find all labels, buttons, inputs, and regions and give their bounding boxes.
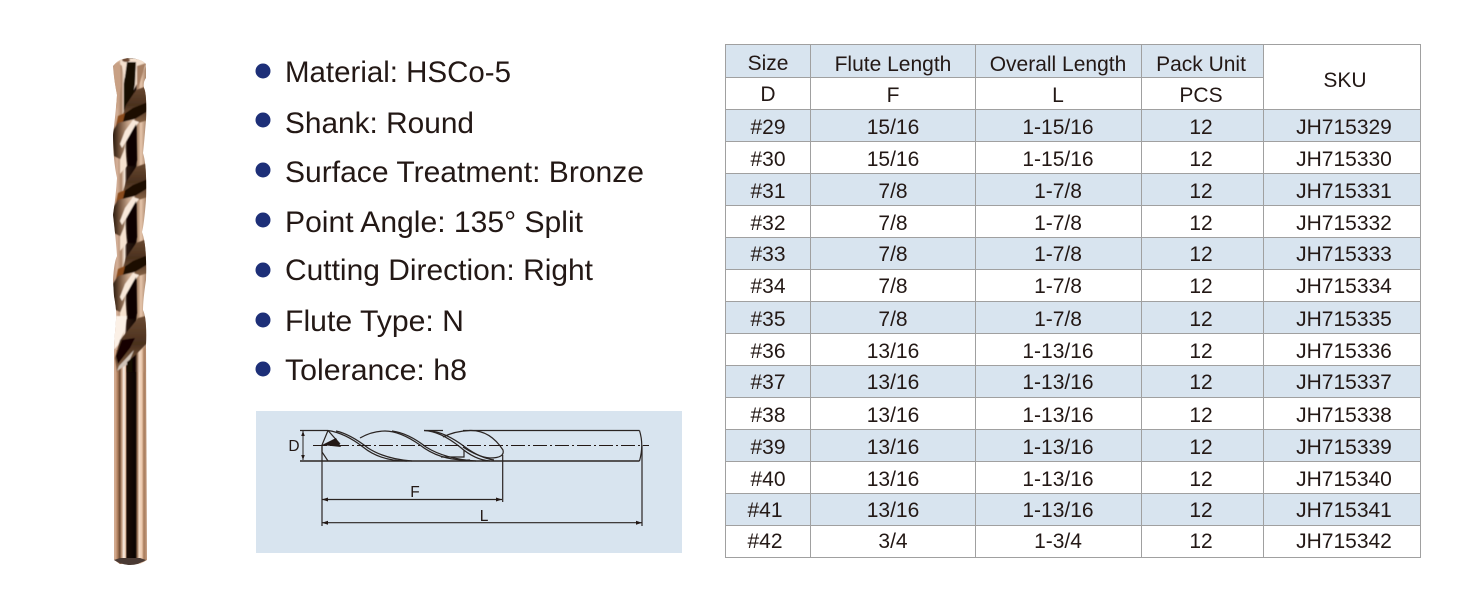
- center line: [313, 444, 649, 446]
- row #39: #39: [750, 436, 786, 459]
- spec: cutting direction: Cutting Direction: Right: [285, 254, 594, 287]
- specification table: [725, 44, 1420, 558]
- row #35: #35: [750, 308, 786, 331]
- table header: Overall Length: [990, 53, 1126, 76]
- row #31: 12: [1189, 180, 1213, 203]
- table header: [748, 52, 1367, 107]
- row #37: 12: [1189, 371, 1213, 394]
- spec: shank: Shank: Round: [285, 107, 474, 140]
- row #35: JH715335: [1296, 308, 1392, 331]
- drill outline: [300, 430, 642, 461]
- row #39: 13/16: [867, 436, 919, 459]
- spec: surface treatment: Surface Treatment: Bronze: [285, 156, 644, 189]
- row #35: [750, 308, 1392, 331]
- row #42: 1-3/4: [1034, 530, 1082, 553]
- row #39: [750, 436, 1392, 459]
- row #34: 12: [1189, 275, 1213, 298]
- row #29: #29: [750, 116, 786, 139]
- row #29: JH715329: [1296, 116, 1392, 139]
- row #38: 13/16: [867, 404, 919, 427]
- row #38: #38: [750, 404, 786, 427]
- row #29: [750, 116, 1392, 139]
- row #33: 12: [1189, 243, 1213, 266]
- row #35: 1-7/8: [1034, 308, 1082, 331]
- row #30: 12: [1189, 148, 1213, 171]
- row #32: 7/8: [878, 212, 908, 235]
- row #33: JH715333: [1296, 243, 1392, 266]
- table header: L: [1052, 84, 1064, 107]
- row #31: 1-7/8: [1034, 180, 1082, 203]
- row #38: 12: [1189, 404, 1213, 427]
- dimension L: [322, 445, 642, 526]
- point angle mark: [322, 438, 341, 447]
- spec: tolerance: Tolerance: h8: [285, 354, 467, 387]
- specification list: [256, 56, 644, 387]
- row #30: [750, 148, 1392, 171]
- row #32: 1-7/8: [1034, 212, 1082, 235]
- row #34: 1-7/8: [1034, 275, 1082, 298]
- row #32: [750, 212, 1392, 235]
- row #39: 12: [1189, 436, 1213, 459]
- row #37: 13/16: [867, 371, 919, 394]
- table header: Flute Length: [835, 53, 951, 76]
- row #30: #30: [750, 148, 786, 171]
- row #30: 15/16: [867, 148, 919, 171]
- spec: point angle: Point Angle: 135° Split: [285, 206, 584, 239]
- row #38: 1-13/16: [1022, 404, 1094, 427]
- table header: Size: [748, 52, 788, 75]
- final flute run-out: [113, 316, 148, 372]
- row #29: 15/16: [867, 116, 919, 139]
- row #31: [750, 180, 1392, 203]
- dimension D: D: [288, 438, 300, 455]
- row #34: 7/8: [878, 275, 908, 298]
- table header: SKU: [1323, 69, 1367, 92]
- row #42: #42: [747, 530, 783, 553]
- panel: dimension diagram: [256, 411, 682, 553]
- row #36: #36: [750, 340, 786, 363]
- table header: D: [760, 83, 776, 106]
- dimension L: L: [480, 508, 489, 525]
- row #41: 12: [1189, 499, 1213, 522]
- spec: material: Material: HSCo-5: [285, 56, 511, 89]
- row #29: 1-15/16: [1022, 116, 1094, 139]
- flute segment 2: [112, 163, 148, 251]
- row #36: 1-13/16: [1022, 340, 1094, 363]
- row #32: #32: [750, 212, 786, 235]
- row #40: 13/16: [867, 468, 919, 491]
- row #41: [747, 499, 1392, 522]
- row #39: JH715339: [1296, 436, 1392, 459]
- row #37: [750, 371, 1392, 394]
- row #41: 1-13/16: [1022, 499, 1094, 522]
- spec: flute type: Flute Type: N: [285, 305, 464, 338]
- row #36: JH715336: [1296, 340, 1392, 363]
- row #41: 13/16: [867, 499, 919, 522]
- drill bit photo: [113, 58, 147, 565]
- row #37: JH715337: [1296, 371, 1392, 394]
- table row shading: [725, 44, 1420, 525]
- row #33: 7/8: [878, 243, 908, 266]
- drill tip shadow: [114, 558, 146, 565]
- row #41: #41: [747, 499, 783, 522]
- row #35: 12: [1189, 308, 1213, 331]
- flute segment 1: [112, 86, 148, 174]
- row #31: JH715331: [1296, 180, 1392, 203]
- dimension D: [288, 431, 305, 460]
- row #36: 12: [1189, 340, 1213, 363]
- row #33: #33: [750, 243, 786, 266]
- row #32: 12: [1189, 212, 1213, 235]
- row #38: [750, 404, 1392, 427]
- row #31: #31: [750, 180, 786, 203]
- row #41: JH715341: [1296, 499, 1392, 522]
- row #37: #37: [750, 371, 786, 394]
- row #35: 7/8: [878, 308, 908, 331]
- row #42: [747, 530, 1392, 553]
- row #38: JH715338: [1296, 404, 1392, 427]
- row #40: [750, 468, 1392, 491]
- table header: Pack Unit: [1156, 53, 1246, 76]
- row #40: 1-13/16: [1022, 468, 1094, 491]
- row #29: 12: [1189, 116, 1213, 139]
- row #39: 1-13/16: [1022, 436, 1094, 459]
- row #42: JH715342: [1296, 530, 1392, 553]
- dimension F: F: [410, 484, 420, 501]
- row #40: #40: [750, 468, 786, 491]
- row #33: [750, 243, 1392, 266]
- row #34: #34: [750, 275, 786, 298]
- row #37: 1-13/16: [1022, 371, 1094, 394]
- row #34: JH715334: [1296, 275, 1392, 298]
- row #40: 12: [1189, 468, 1213, 491]
- row #31: 7/8: [878, 180, 908, 203]
- table header: F: [887, 84, 899, 107]
- dimension F: [322, 445, 503, 526]
- row #32: JH715332: [1296, 212, 1392, 235]
- table header: PCS: [1179, 84, 1223, 107]
- row #40: JH715340: [1296, 468, 1392, 491]
- row #30: JH715330: [1296, 148, 1392, 171]
- flute segment 3: [113, 240, 146, 320]
- row #42: 3/4: [878, 530, 908, 553]
- row #36: [750, 340, 1392, 363]
- row #36: 13/16: [867, 340, 919, 363]
- row #30: 1-15/16: [1022, 148, 1094, 171]
- row #42: 12: [1189, 530, 1213, 553]
- row #33: 1-7/8: [1034, 243, 1082, 266]
- row #34: [750, 275, 1392, 298]
